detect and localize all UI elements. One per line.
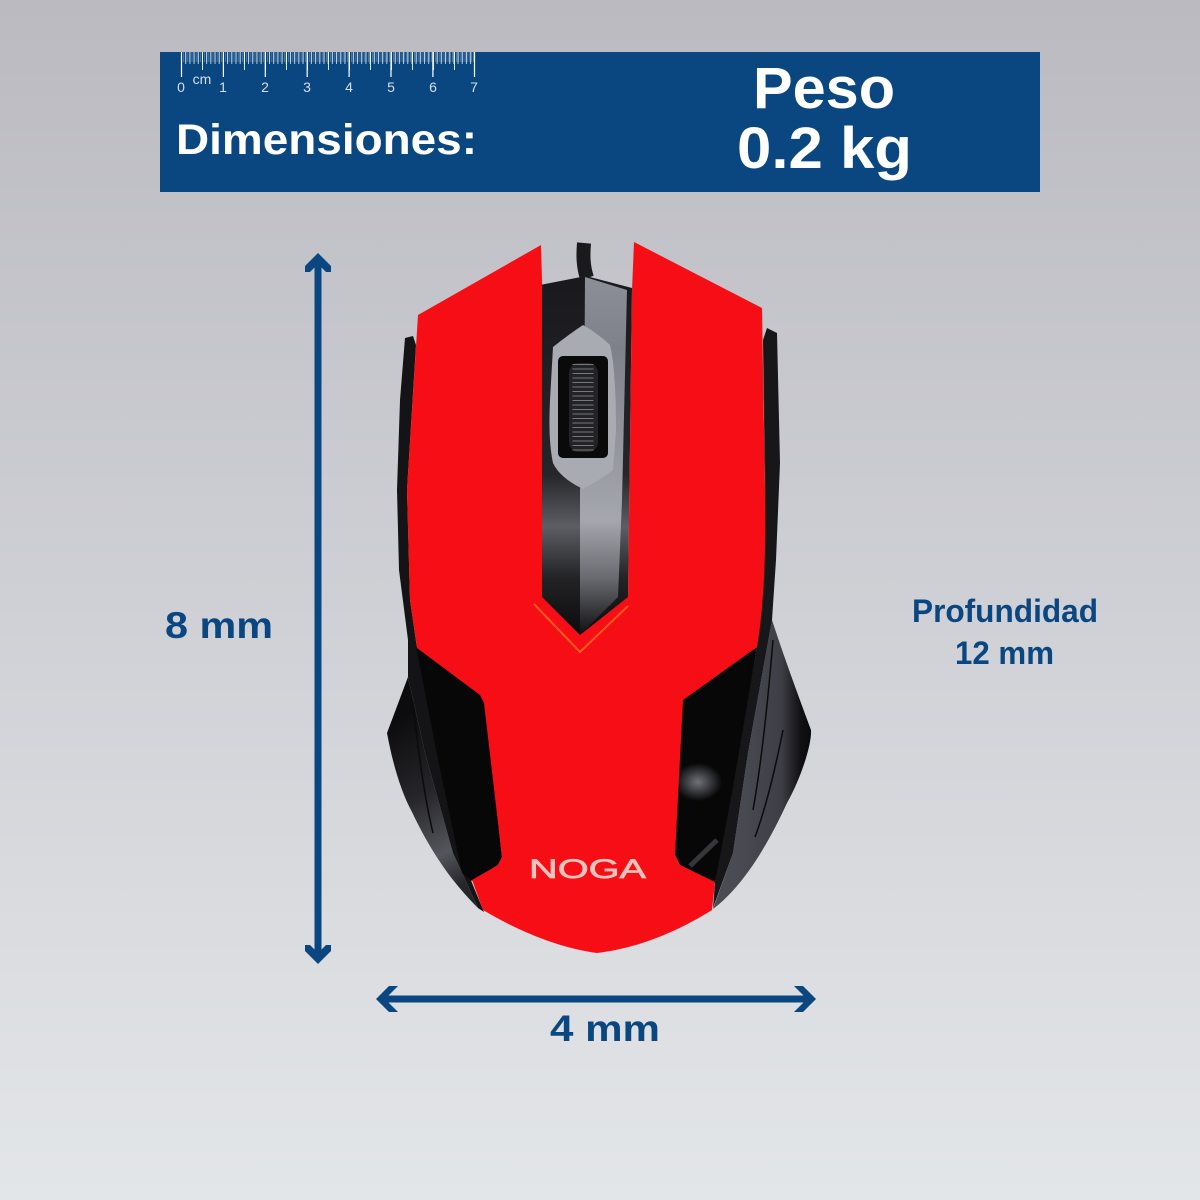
depth label	[912, 593, 1098, 671]
scroll wheel	[558, 356, 608, 458]
right glossy panel	[674, 647, 757, 883]
depth label: Profundidad	[912, 593, 1098, 629]
ruler: 1	[219, 79, 227, 95]
weight label: Peso	[753, 56, 895, 121]
center channel	[540, 276, 632, 640]
left side rail	[397, 336, 484, 912]
right side wing	[713, 620, 811, 909]
ruler: 5	[387, 79, 395, 95]
scroll surround	[549, 325, 616, 489]
cable	[583, 243, 587, 278]
ruler: 2	[261, 79, 269, 95]
heading: dimensiones: Dimensiones:	[176, 116, 477, 164]
ruler: 3	[303, 79, 311, 95]
center grey spine	[580, 277, 627, 635]
ruler	[177, 52, 478, 95]
height label: 8 mm	[165, 605, 273, 646]
wing grooves	[413, 640, 783, 837]
mouse photo	[387, 242, 811, 953]
notch highlight	[534, 604, 628, 652]
left side wing	[387, 677, 478, 908]
weight value: 0.2 kg	[737, 116, 912, 181]
ruler: 4	[345, 79, 353, 95]
ruler: 7	[470, 79, 478, 95]
arrow: width	[376, 986, 816, 1012]
depth label: 12 mm	[955, 635, 1054, 671]
logo: NOGA	[529, 854, 646, 884]
left glossy panel	[416, 646, 502, 881]
header band	[160, 52, 1040, 192]
ruler: 0	[177, 79, 185, 95]
ruler: cm	[193, 71, 211, 87]
right side rail	[713, 328, 780, 908]
arrow: height	[305, 253, 331, 964]
red shell	[407, 242, 765, 953]
ruler: 6	[429, 79, 437, 95]
width label: 4 mm	[550, 1008, 660, 1049]
